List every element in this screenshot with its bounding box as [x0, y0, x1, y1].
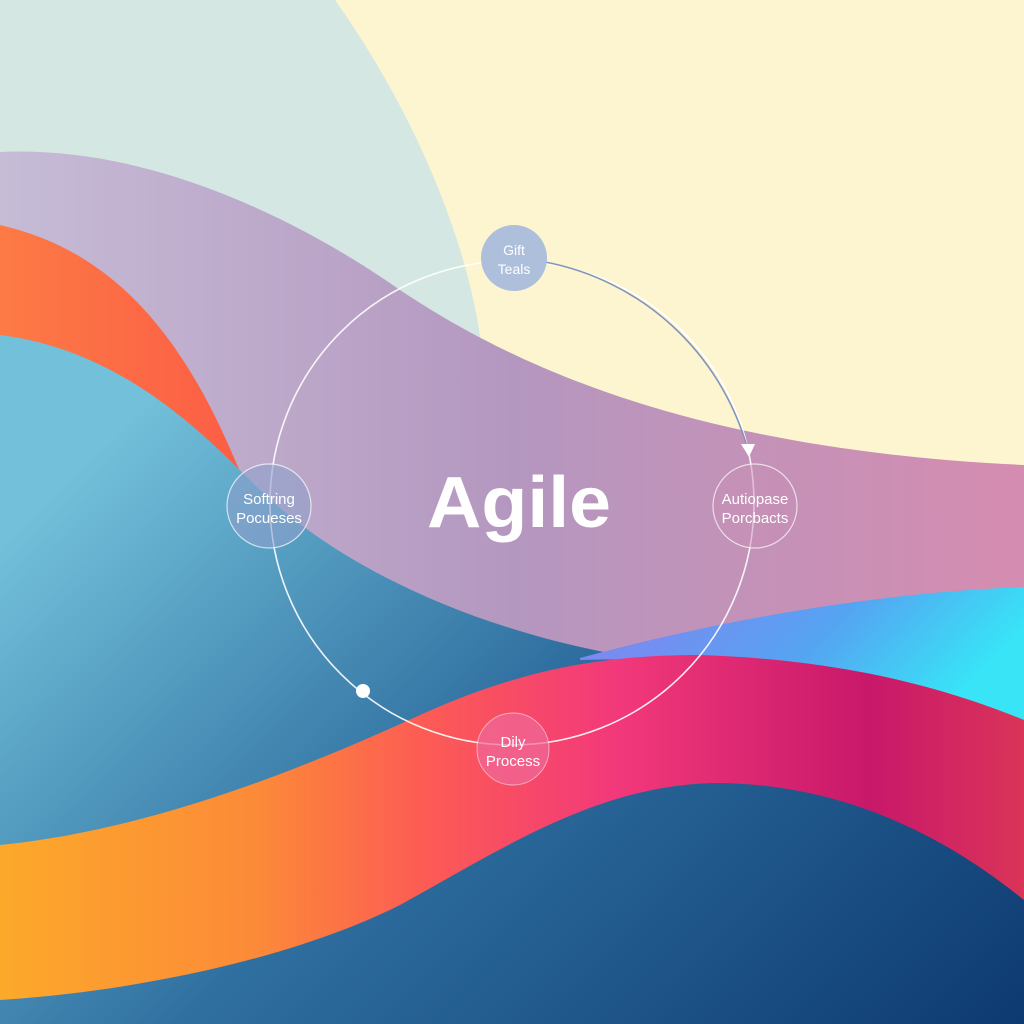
background teal region: [0, 0, 482, 350]
cyan band right: [580, 587, 1024, 722]
node: Softring Pocueses: [227, 464, 311, 548]
node: Dily Process: [477, 713, 549, 785]
arrow head: [741, 444, 755, 457]
node: Dily Process: Process: [486, 753, 540, 770]
node: Gift Teals: Gift: [503, 242, 525, 258]
node: Autiopase Porcbacts: Autiopase: [722, 491, 788, 508]
node: Softring Pocueses: Softring: [243, 491, 295, 508]
pink orange band: [0, 655, 1024, 1000]
orange band left: [0, 225, 270, 540]
node: Dily Process: Dily: [500, 734, 526, 751]
cycle ring: [270, 261, 754, 745]
small dot: [356, 684, 370, 698]
title: Agile: [427, 463, 611, 543]
node: Gift Teals: Teals: [498, 261, 530, 277]
blue area: [0, 335, 1024, 1024]
node: Autiopase Porcbacts: [713, 464, 797, 548]
node: Softring Pocueses: Pocueses: [236, 510, 302, 527]
node: Gift Teals: [481, 225, 547, 291]
node: Autiopase Porcbacts: Porcbacts: [722, 510, 788, 527]
